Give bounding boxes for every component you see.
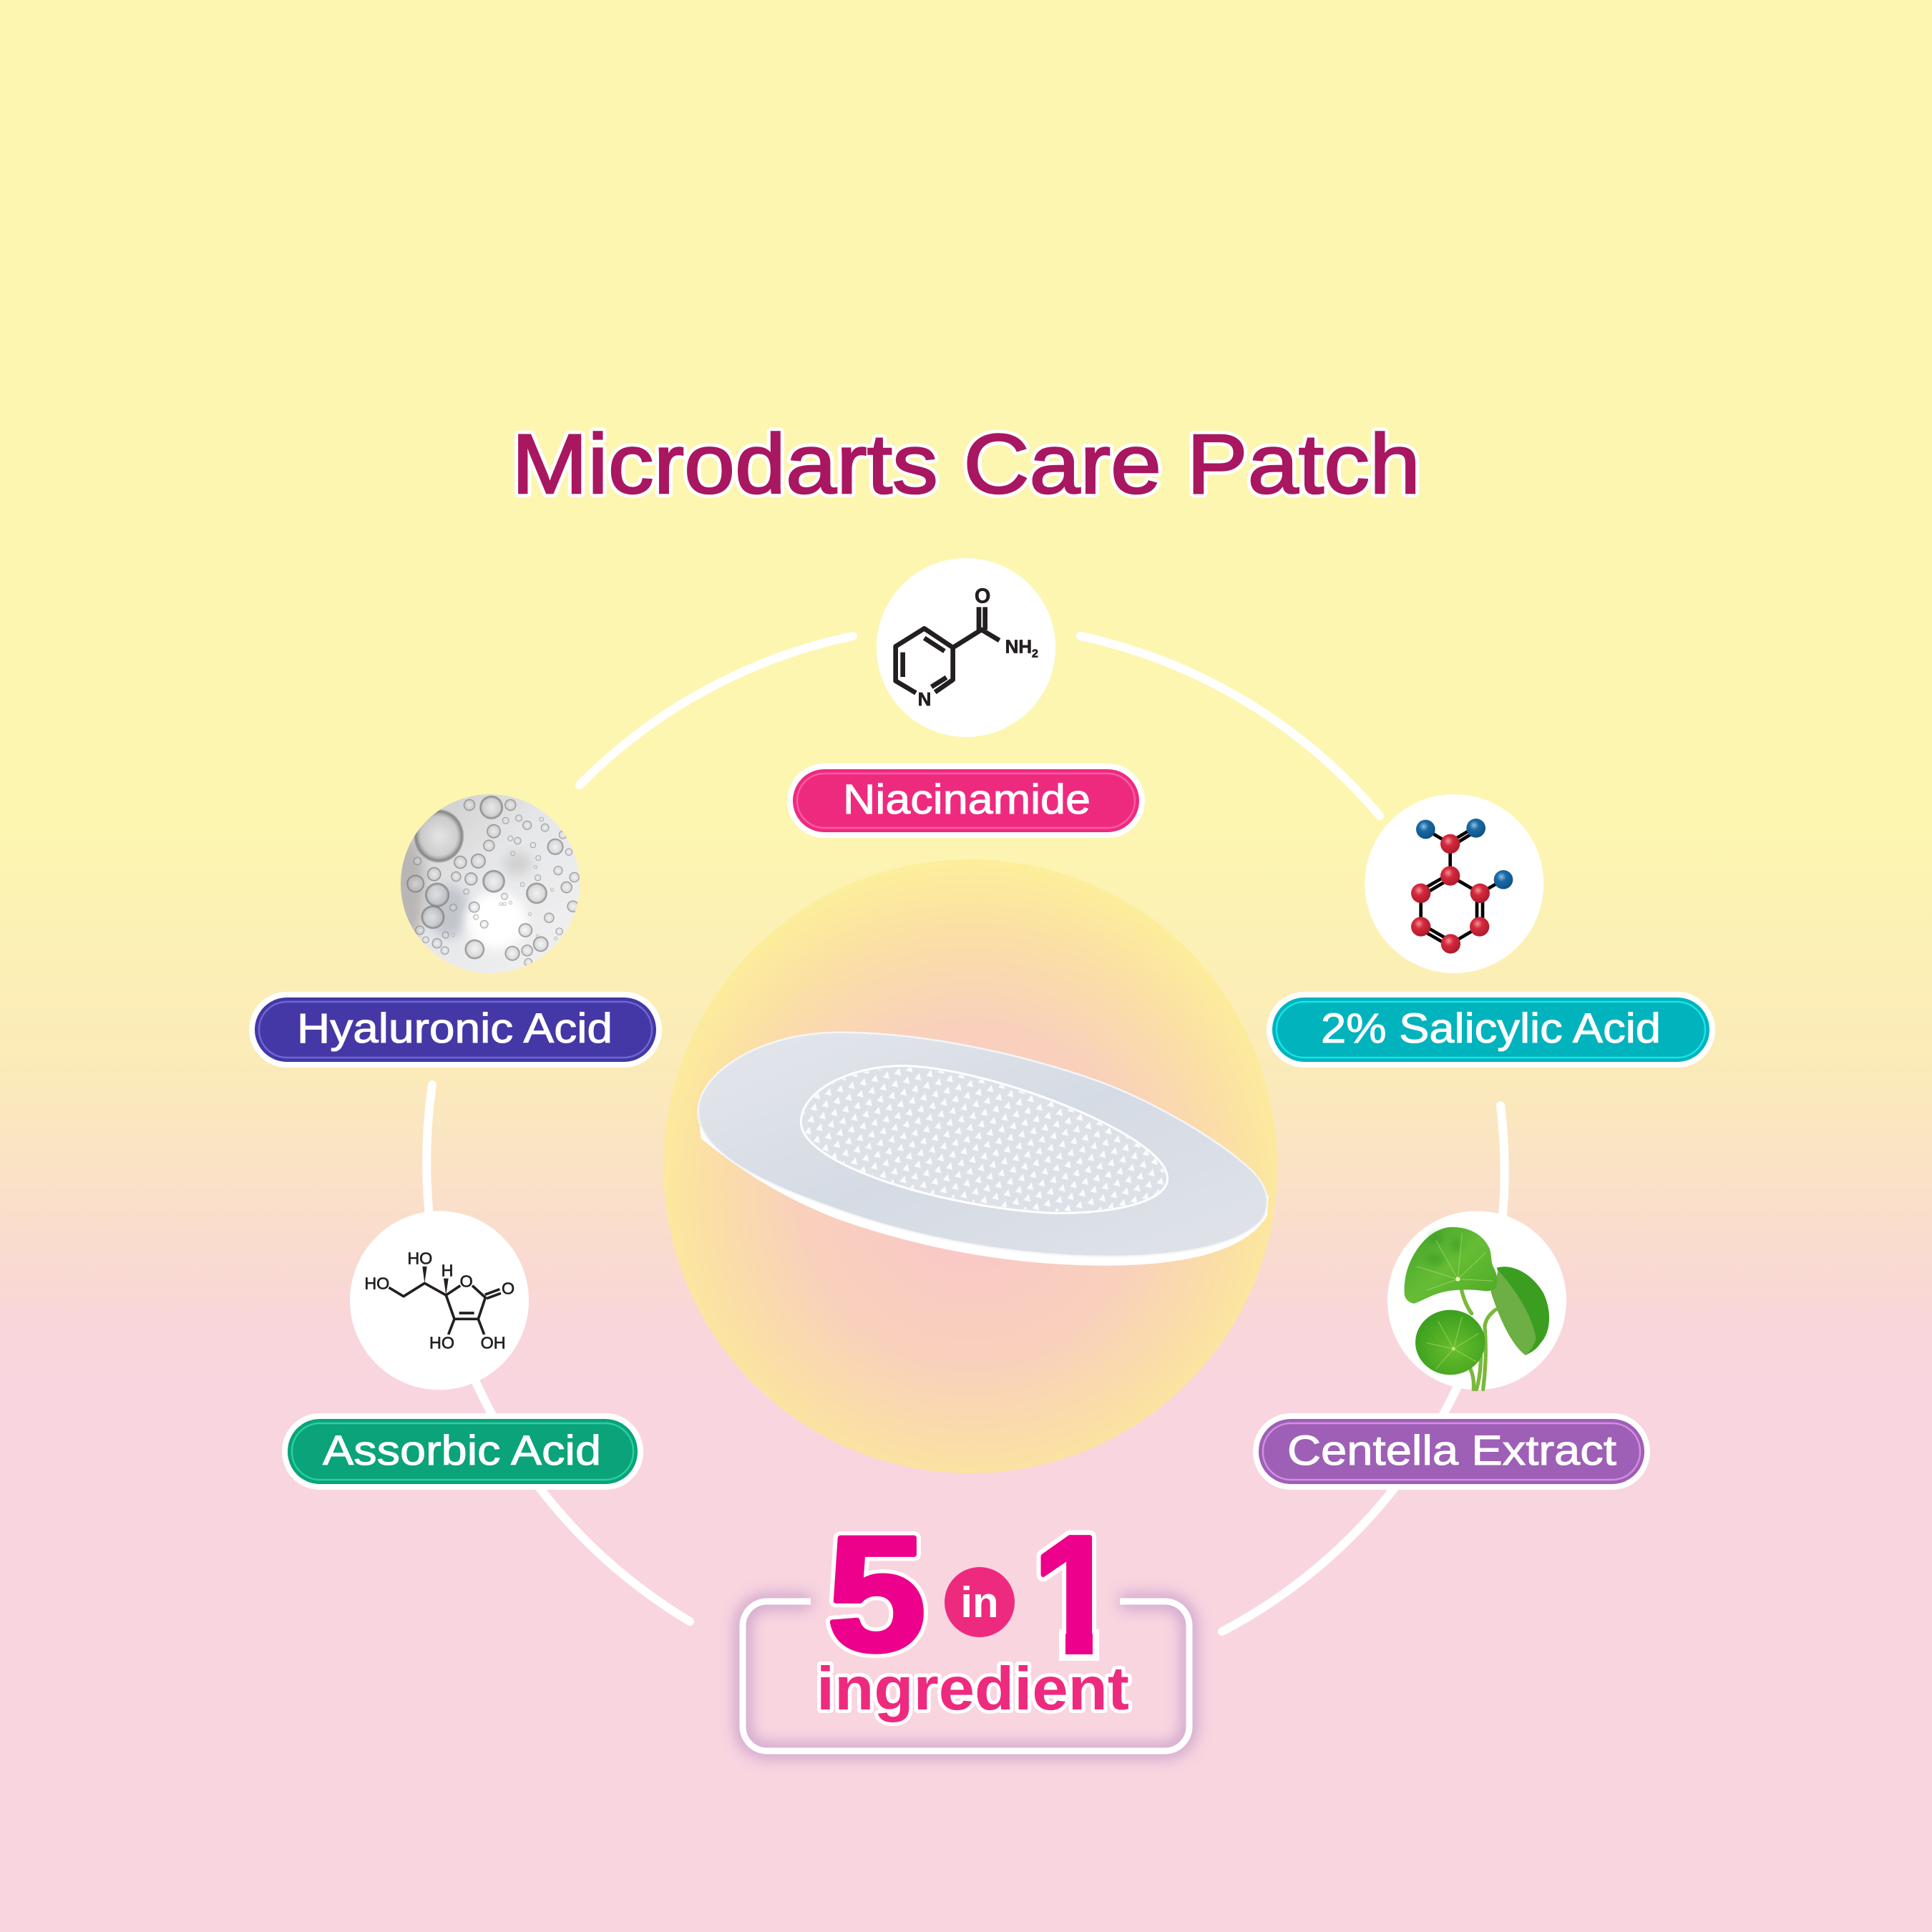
icon: centella leaves photo xyxy=(1387,1211,1566,1390)
icon: niacinamide molecule: N xyxy=(918,688,931,710)
in badge: in xyxy=(960,1579,999,1626)
in badge xyxy=(945,1567,1015,1637)
label pill: 2% Salicylic Acid xyxy=(1267,992,1715,1068)
icon: ascorbic acid molecule: H xyxy=(441,1261,454,1279)
ingredient: Assorbic Acid xyxy=(282,1211,643,1490)
icon: hyaluronic acid bubbles photo xyxy=(391,794,580,973)
label pill: Niacinamide xyxy=(787,763,1145,838)
number one xyxy=(1036,1530,1099,1661)
label pill: Hyaluronic Acid xyxy=(249,992,662,1068)
label pill: Hyaluronic Acid: Hyaluronic Acid xyxy=(297,1005,613,1052)
icon: ascorbic acid molecule: O xyxy=(460,1272,473,1290)
patch white rim xyxy=(700,1126,1269,1266)
microneedle patch xyxy=(698,1033,1269,1266)
connecting ring arcs xyxy=(426,636,1505,1631)
label pill: Assorbic Acid xyxy=(282,1413,643,1490)
patch surface xyxy=(698,1033,1267,1257)
badge frame shadow xyxy=(743,1601,1189,1751)
icon: niacinamide molecule: NH xyxy=(1005,636,1032,658)
ingredient: Niacinamide xyxy=(787,558,1145,838)
central glowing circle xyxy=(663,859,1277,1473)
5 in 1 ingredient badge xyxy=(743,1501,1189,1751)
ingredient word: ingredient xyxy=(816,1655,1129,1723)
label pill: Centella Extract: Centella Extract xyxy=(1287,1428,1616,1474)
icon: ascorbic acid molecule: HO xyxy=(429,1333,454,1352)
title: Microdarts Care Patch xyxy=(512,417,1420,512)
ingredient: 2% Salicylic Acid xyxy=(1267,794,1715,1068)
title: Microdarts Care Patch xyxy=(512,417,1420,512)
ingredient: Hyaluronic Acid xyxy=(249,794,662,1068)
ingredient: Centella Extract xyxy=(1253,1211,1650,1490)
icon: ascorbic acid molecule: OH xyxy=(481,1333,506,1352)
label pill: Assorbic Acid: Assorbic Acid xyxy=(323,1428,601,1474)
icon: niacinamide molecule xyxy=(877,558,1055,737)
number five: 5 xyxy=(827,1503,926,1685)
icon: ascorbic acid molecule: O xyxy=(502,1279,514,1298)
icon: ascorbic acid molecule: HO xyxy=(407,1249,432,1268)
icon: salicylic acid ball-and-stick molecule xyxy=(1365,794,1543,973)
label pill: Niacinamide: Niacinamide xyxy=(843,776,1091,823)
number five: 5 xyxy=(827,1503,926,1685)
badge frame xyxy=(743,1601,1189,1751)
microneedle field xyxy=(801,1065,1168,1213)
icon: niacinamide molecule: O xyxy=(975,585,990,608)
label pill: Centella Extract xyxy=(1253,1413,1650,1490)
number one: 1 xyxy=(1033,1501,1118,1690)
number one: 1 xyxy=(1033,1501,1118,1690)
icon: niacinamide molecule: 2 xyxy=(1032,648,1038,660)
icon: ascorbic acid molecule xyxy=(350,1211,529,1390)
icon: ascorbic acid molecule: HO xyxy=(364,1274,389,1293)
infographic canvas xyxy=(0,428,1932,1932)
label pill: 2% Salicylic Acid: 2% Salicylic Acid xyxy=(1321,1005,1661,1052)
